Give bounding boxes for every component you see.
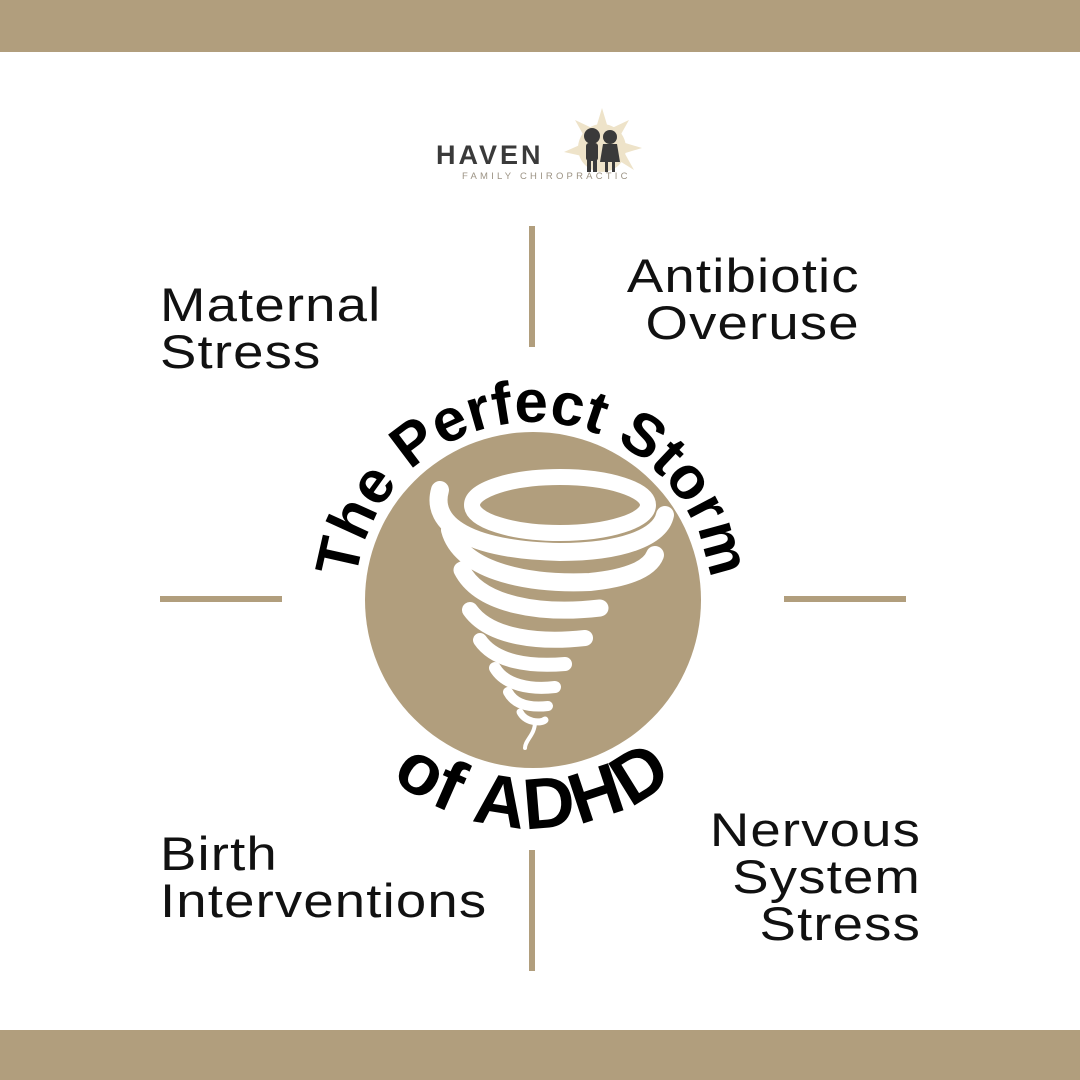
divider bottom bbox=[529, 850, 535, 971]
center emblem bbox=[315, 380, 740, 830]
label: Maternal Stress: Stress bbox=[160, 325, 321, 378]
logo: HAVEN bbox=[436, 140, 544, 170]
label: Nervous System Stress: Nervous bbox=[710, 803, 921, 856]
divider right bbox=[784, 596, 906, 602]
label: Birth Interventions bbox=[160, 827, 487, 927]
logo bbox=[436, 108, 642, 182]
bottom bar bbox=[0, 1030, 1080, 1080]
logo: FAMILY CHIROPRACTIC bbox=[462, 171, 631, 182]
top bar bbox=[0, 0, 1080, 52]
title: The Perfect Storm: The Perfect Storm bbox=[315, 380, 740, 575]
title: of ADHD: of ADHD bbox=[398, 748, 664, 830]
divider top bbox=[529, 226, 535, 347]
label: Antibiotic Overuse bbox=[627, 249, 860, 349]
label: Maternal Stress bbox=[160, 278, 381, 378]
label: Antibiotic Overuse: Antibiotic bbox=[627, 249, 860, 302]
label: Nervous System Stress: System bbox=[732, 850, 921, 903]
circle bbox=[365, 432, 701, 768]
label: Birth Interventions: Birth bbox=[160, 827, 278, 880]
divider left bbox=[160, 596, 282, 602]
label: Nervous System Stress: Stress bbox=[760, 897, 921, 950]
icon: sun with children bbox=[564, 108, 642, 172]
label: Nervous System Stress bbox=[710, 803, 921, 950]
label: Antibiotic Overuse: Overuse bbox=[646, 296, 860, 349]
label: Maternal Stress: Maternal bbox=[160, 278, 381, 331]
icon: tornado bbox=[438, 477, 665, 748]
label: Birth Interventions: Interventions bbox=[160, 874, 487, 927]
